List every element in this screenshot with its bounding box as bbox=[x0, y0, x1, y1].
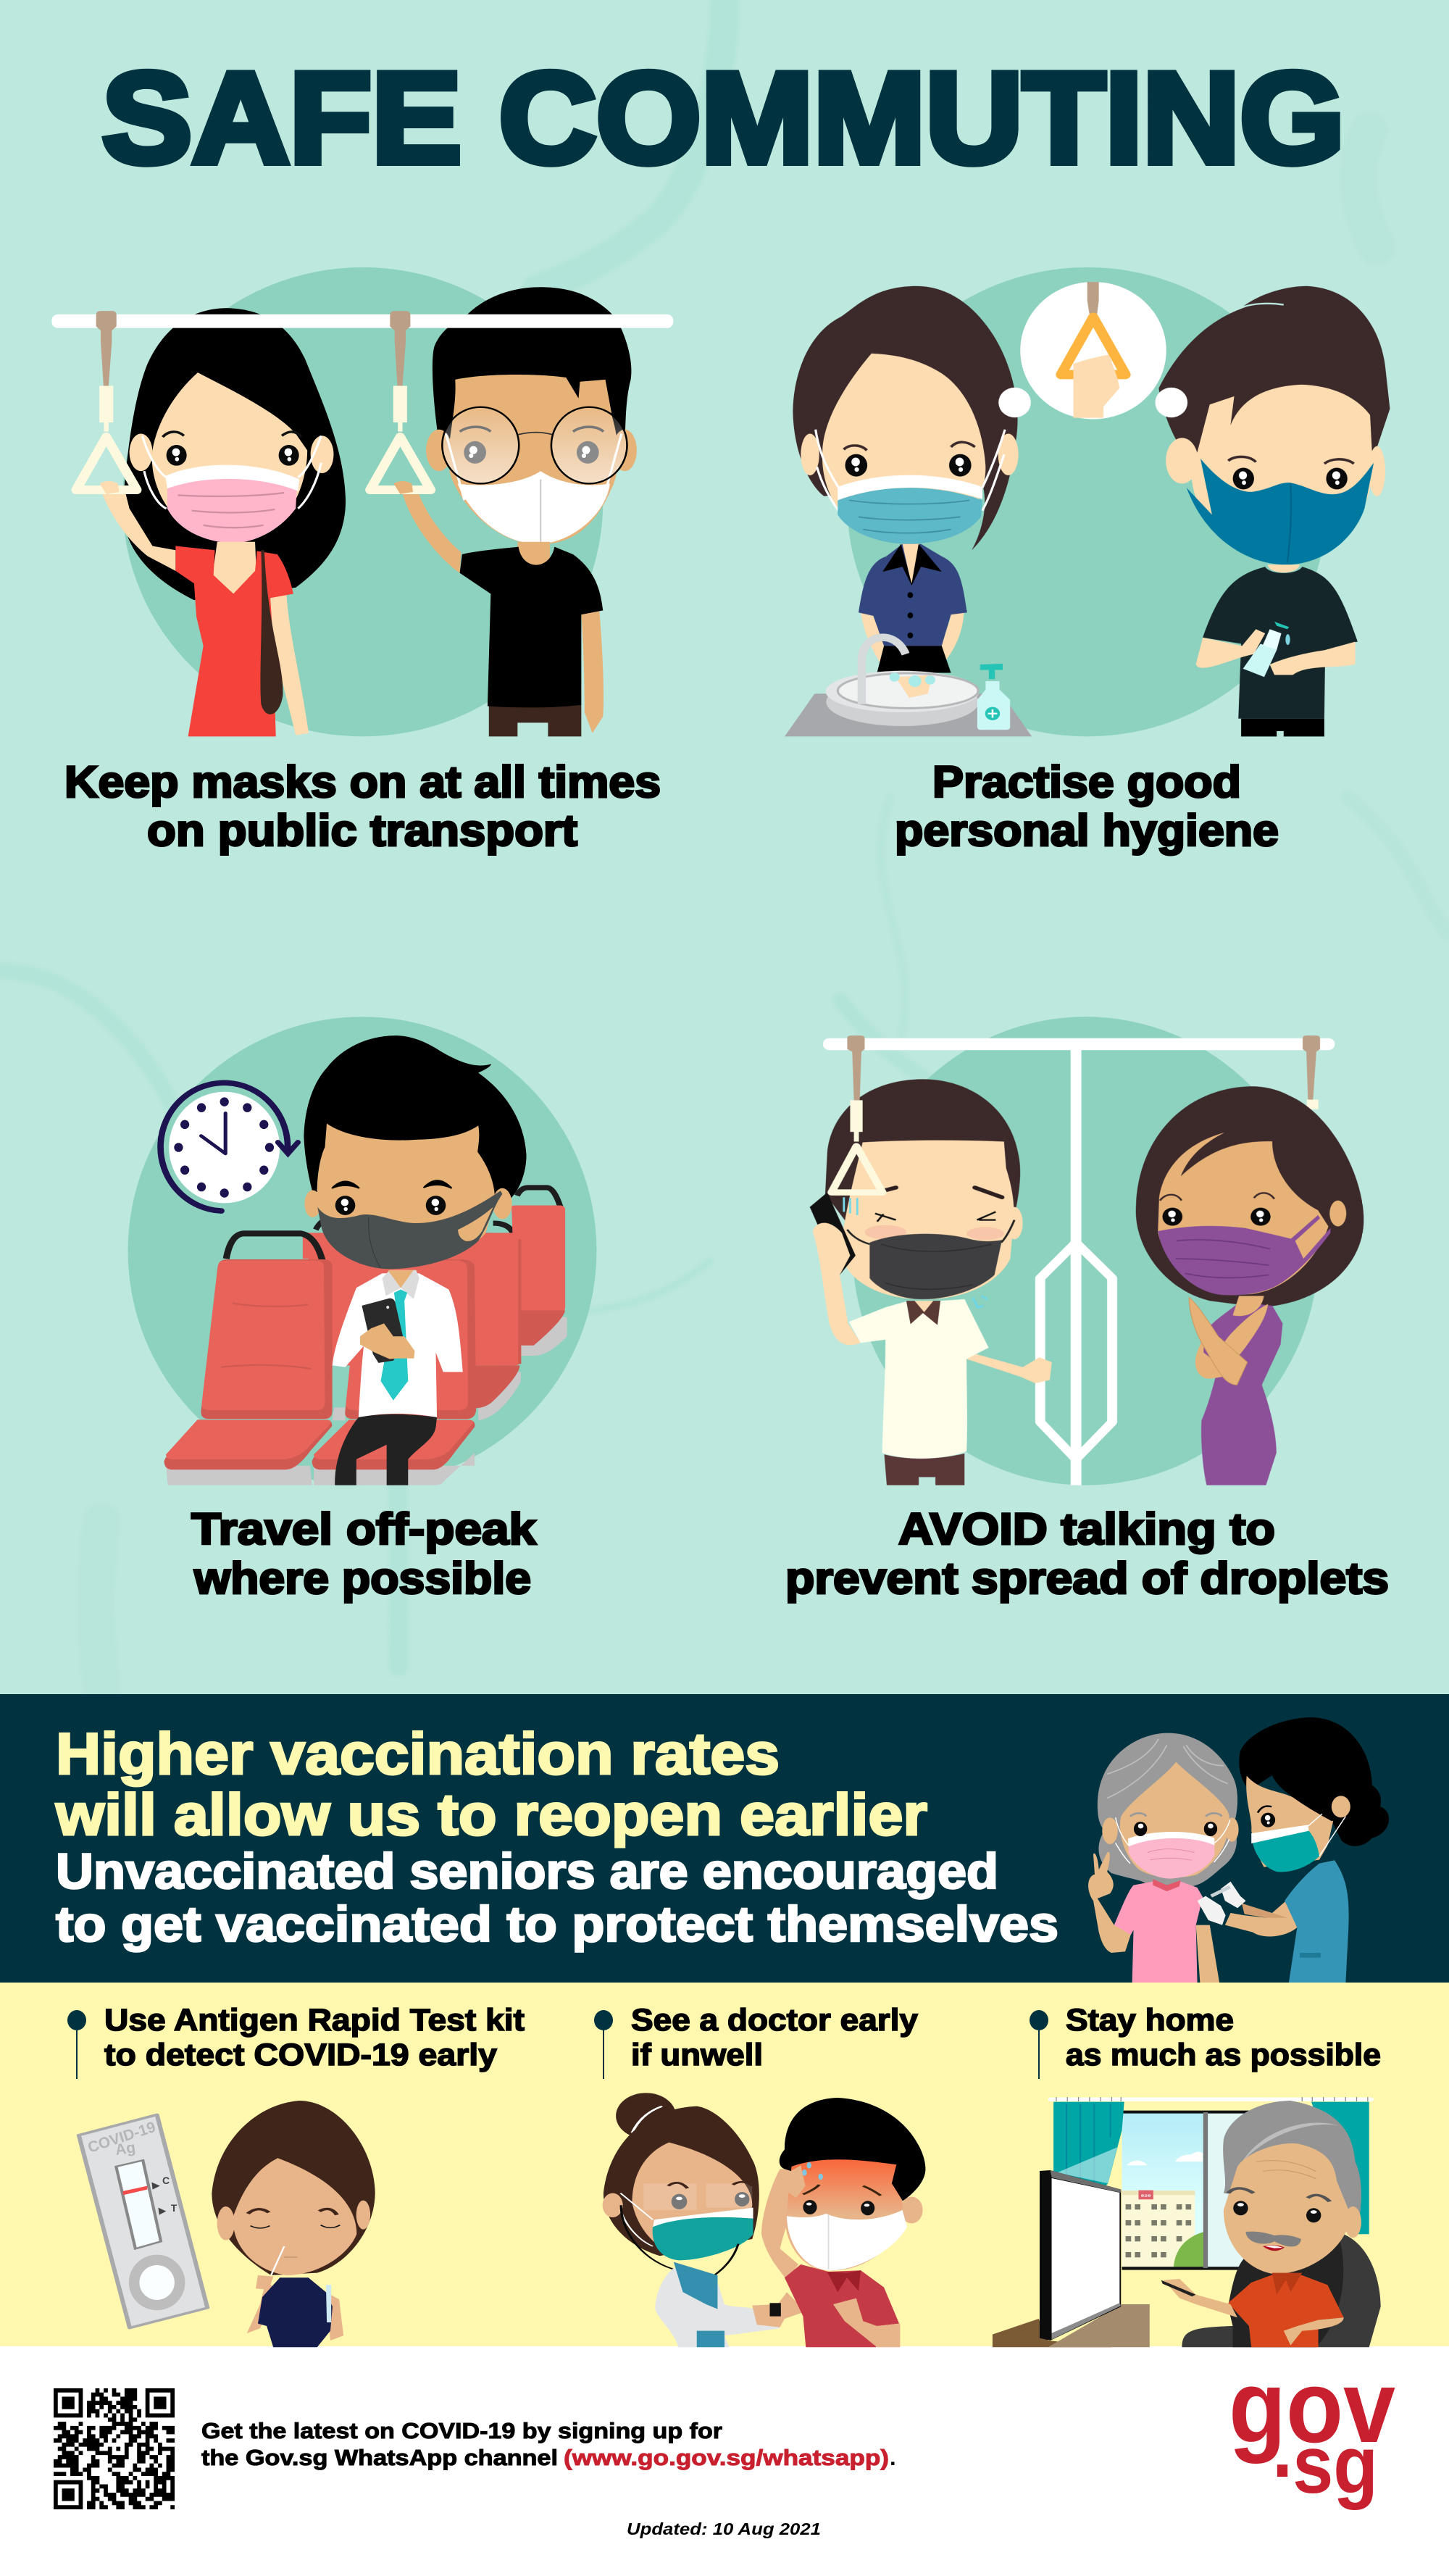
footer background bbox=[0, 2346, 1449, 2576]
label: test kit brand bbox=[85, 2119, 178, 2214]
heading: antigen rapid test bbox=[104, 2003, 525, 2072]
caption: travel off-peak bbox=[191, 1504, 536, 1603]
caption: avoid talking: prevent spread of droplets bbox=[785, 1554, 1389, 1603]
illustration: doctor examining sick patient bbox=[603, 2093, 925, 2347]
heading: see a doctor bbox=[631, 2003, 918, 2072]
illustration: man on phone and woman crossing arms bbox=[810, 1017, 1364, 1485]
heading: vaccination: Higher vaccination rates bbox=[56, 1722, 780, 1787]
illustration: senior watching tv at home bbox=[993, 2097, 1381, 2347]
footer: whatsapp signup text bbox=[201, 2418, 896, 2470]
caption: personal hygiene: Practise good bbox=[932, 757, 1241, 806]
banner background bbox=[0, 1694, 1449, 1983]
illustration: senior watching tv at home: 828 bbox=[1141, 2194, 1151, 2198]
caption: travel off-peak: where possible bbox=[193, 1554, 531, 1603]
icon: clock with arrow bbox=[161, 1083, 298, 1211]
bullet pin bbox=[594, 2010, 613, 2079]
logo: gov.sg: gov bbox=[1229, 2349, 1395, 2464]
illustration: nurse vaccinating senior bbox=[1088, 1717, 1389, 1983]
title: SAFE COMMUTING bbox=[102, 46, 1345, 190]
label: test kit brand: T bbox=[171, 2202, 178, 2214]
footer: whatsapp signup text: Get the latest on COVID-19 by signing up for bbox=[201, 2418, 722, 2443]
footer: updated date: Updated: 10 Aug 2021 bbox=[627, 2519, 821, 2538]
bullet pin bbox=[67, 2010, 86, 2079]
bullet pin bbox=[1030, 2010, 1048, 2079]
heading: antigen rapid test: Use Antigen Rapid Test kit bbox=[104, 2003, 525, 2038]
logo: gov.sg: sg bbox=[1293, 2419, 1378, 2510]
heading: antigen rapid test: to detect COVID-19 early bbox=[104, 2038, 497, 2072]
panel: travel off-peak bbox=[128, 1017, 596, 1603]
heading: see a doctor: if unwell bbox=[631, 2038, 763, 2072]
label: test kit brand: C bbox=[162, 2175, 170, 2186]
panel: avoid talking bbox=[785, 1017, 1389, 1603]
illustration: test kit and woman swabbing bbox=[79, 2101, 375, 2347]
label: test kit brand: COVID-19 bbox=[85, 2119, 158, 2156]
caption: keep masks on: Keep masks on at all times bbox=[64, 757, 661, 806]
text: seniors encouraged: to get vaccinated to protect themselves bbox=[56, 1896, 1058, 1952]
tip: stay home bbox=[993, 2003, 1381, 2347]
label: test kit brand: Ag bbox=[114, 2139, 137, 2159]
footer: whatsapp signup text: (www.go.gov.sg/whatsapp) bbox=[564, 2445, 889, 2470]
background bbox=[0, 0, 1449, 1696]
panel: keep masks on bbox=[51, 267, 673, 855]
footer: whatsapp signup text: . bbox=[890, 2445, 896, 2470]
heading: see a doctor: See a doctor early bbox=[631, 2003, 918, 2038]
illustration: two masked commuters holding straps bbox=[51, 267, 673, 736]
heading: stay home bbox=[1066, 2003, 1381, 2072]
caption: avoid talking bbox=[785, 1504, 1389, 1603]
footer: qr code bbox=[54, 2388, 175, 2509]
tip: antigen rapid test bbox=[67, 2003, 525, 2347]
logo: gov.sg: . bbox=[1272, 2404, 1293, 2494]
heading: vaccination bbox=[55, 1722, 927, 1848]
illustration: commuter on bus seat with clock bbox=[128, 1017, 596, 1485]
caption: travel off-peak: Travel off-peak bbox=[191, 1504, 536, 1554]
heading: stay home: Stay home bbox=[1066, 2003, 1234, 2038]
panel: yellow tips band bbox=[0, 1983, 1449, 2346]
heading: stay home: as much as possible bbox=[1066, 2038, 1381, 2072]
caption: personal hygiene bbox=[895, 757, 1279, 855]
text: seniors encouraged: Unvaccinated seniors are encouraged bbox=[56, 1843, 998, 1899]
caption: avoid talking: AVOID talking to bbox=[898, 1504, 1275, 1554]
caption: keep masks on bbox=[64, 757, 661, 855]
caption: personal hygiene: personal hygiene bbox=[895, 806, 1279, 855]
caption: keep masks on: on public transport bbox=[147, 806, 577, 855]
logo: gov.sg bbox=[1229, 2349, 1395, 2510]
footer: whatsapp signup text: the Gov.sg WhatsApp channel bbox=[201, 2445, 558, 2470]
panel: vaccination banner bbox=[0, 1694, 1449, 1983]
illustration: hand washing and sanitiser bbox=[785, 267, 1390, 736]
tip: see a doctor bbox=[594, 2003, 925, 2347]
text: seniors encouraged bbox=[56, 1843, 1058, 1952]
panel: personal hygiene bbox=[785, 267, 1390, 855]
heading: vaccination: will allow us to reopen earlier bbox=[55, 1783, 927, 1848]
